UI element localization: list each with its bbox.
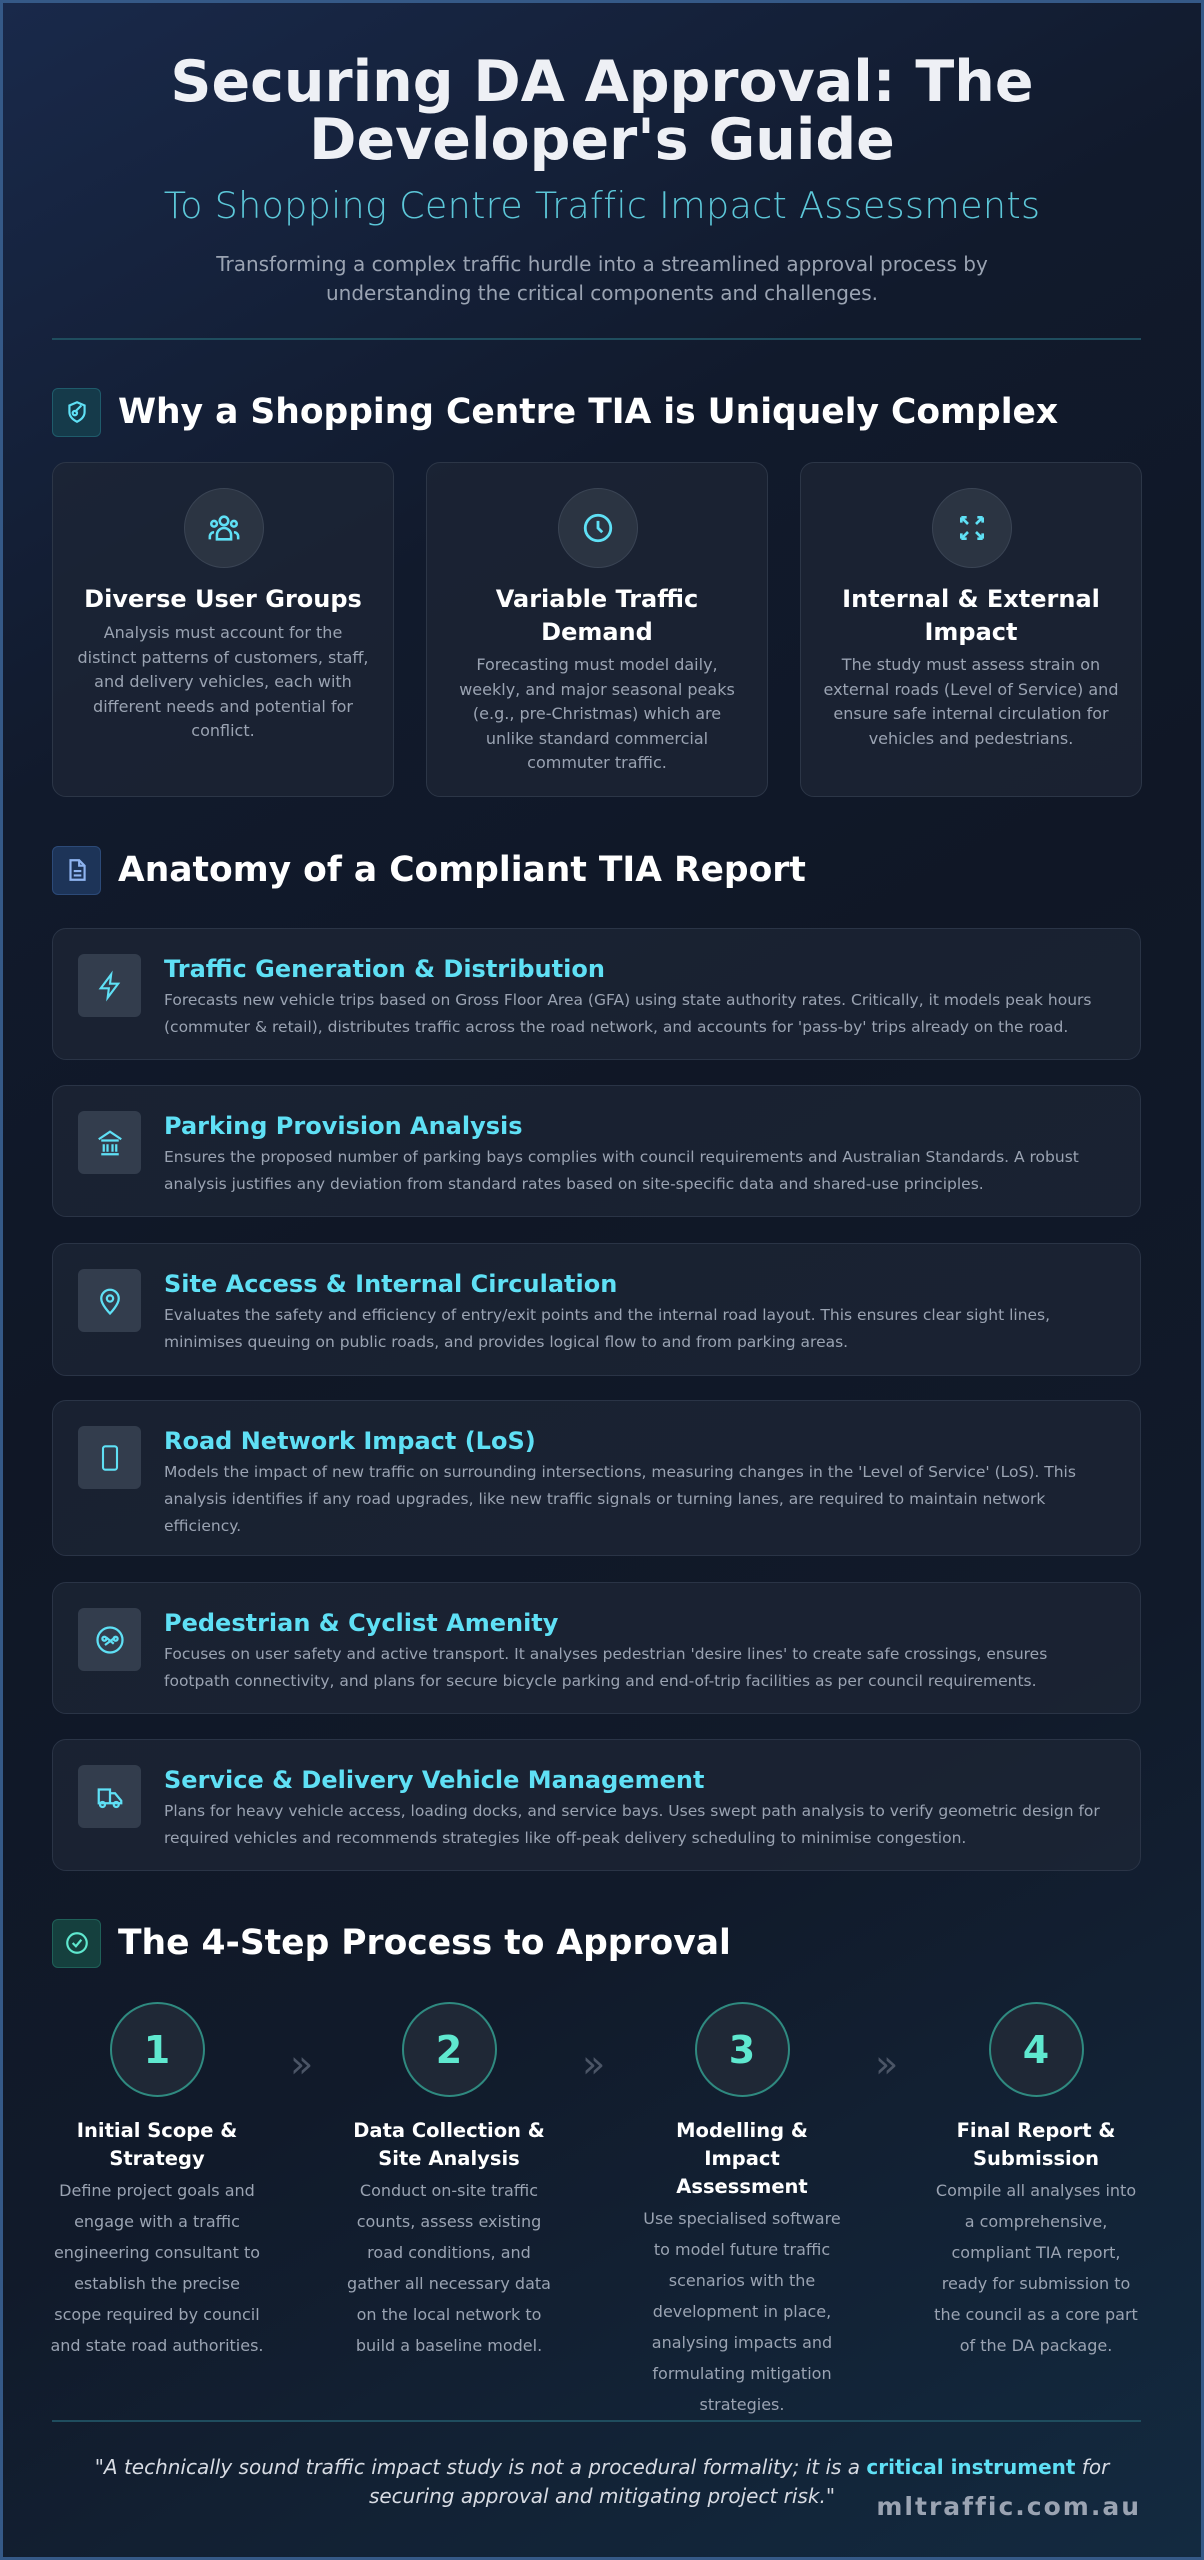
row: road network: Road Network Impact (LoS) (164, 1427, 536, 1455)
step 1: Define project goals and engage with a traffic engineering consultant to establish the precise scope required by council and state road authorities. (50, 2181, 264, 2355)
card: internal external (800, 462, 1142, 797)
step 2: Data Collection & (353, 2119, 545, 2142)
row: pedestrian: Focuses on user safety and active transport. It analyses pedestrian 'desire lines' to create safe crossings, ensures footpath connectivity, and plans for secure bicycle parking and end-of-trip facilities as per council requirements. (164, 1645, 1047, 1690)
row: parking: Ensures the proposed number of parking bays complies with council requirements and Australian Standards. A robust analysis justifies any deviation from standard rates based on site-specific data and shared-use principles. (164, 1148, 1079, 1193)
arrow 3: » (875, 2042, 898, 2086)
row: road network: Models the impact of new traffic on surrounding intersections, measuring changes in the 'Level of Service' (LoS). This analysis identifies if any road upgrades, like new traffic signals or turning lanes, are required to maintain network efficiency. (164, 1463, 1076, 1535)
heading: process: The 4-Step Process to Approval (118, 1923, 731, 1963)
row: pedestrian: Pedestrian & Cyclist Amenity (164, 1609, 558, 1637)
card: variable demand: Forecasting must model daily, weekly, and major seasonal peaks (e.g., pre-Christmas) which are unlike standard commercial commuter traffic. (459, 655, 735, 772)
card: diverse user groups: Analysis must account for the distinct patterns of customers, staff, and delivery vehicles, each with different needs and potential for conflict. (77, 623, 369, 740)
card: variable demand (426, 462, 768, 797)
row: service delivery: Service & Delivery Vehicle Management (164, 1766, 704, 1794)
title: Securing DA Approval: The (170, 49, 1034, 115)
arrow 2: » (582, 2042, 605, 2086)
step 2: Conduct on-site traffic counts, assess existing road conditions, and gather all necessary data on the local network to build a baseline model. (347, 2181, 551, 2355)
title: Developer's Guide (309, 107, 895, 173)
heading: anatomy: Anatomy of a Compliant TIA Report (118, 850, 806, 890)
title (170, 49, 1034, 173)
step 4: Compile all analyses into a comprehensive, compliant TIA report, ready for submission to the council as a core part of the DA package. (934, 2181, 1138, 2355)
subtitle: To Shopping Centre Traffic Impact Assessments (164, 184, 1040, 227)
row: service delivery: Plans for heavy vehicle access, loading docks, and service bays. Uses swept path analysis to verify geometric design for required vehicles and recommends strategies like off-peak delivery scheduling to minimise congestion. (164, 1802, 1100, 1847)
row: pedestrian (52, 1582, 1141, 1714)
row: traffic generation (52, 928, 1141, 1060)
brand: mltraffic.com.au (876, 2492, 1141, 2521)
step 1: Strategy (109, 2147, 205, 2170)
step 1: Initial Scope & (77, 2119, 237, 2142)
step 3: Impact (704, 2147, 780, 2170)
card: internal external: Internal & External Impact (842, 585, 1100, 646)
step 4: 4 (1023, 2028, 1049, 2072)
step 4: Final Report & (957, 2119, 1115, 2142)
card: internal external: The study must assess strain on external roads (Level of Service) and ensure safe internal circulation for vehicles and pedestrians. (824, 655, 1118, 748)
step 2 (347, 2002, 551, 2355)
row: parking: Parking Provision Analysis (164, 1112, 523, 1140)
row: parking (52, 1085, 1141, 1217)
row: traffic generation: Traffic Generation & Distribution (164, 955, 605, 983)
step 3: Use specialised software to model future traffic scenarios with the development in place, analysing impacts and formulating mitigation strategies. (643, 2209, 841, 2414)
step 3 (643, 2002, 841, 2414)
card: variable demand: Variable Traffic Demand (496, 585, 698, 646)
step 4 (934, 2002, 1138, 2355)
row: site access (52, 1243, 1141, 1376)
row: service delivery (52, 1739, 1141, 1871)
row: traffic generation: Forecasts new vehicle trips based on Gross Floor Area (GFA) using state authority rates. Critically, it models peak hours (commuter & retail), distributes traffic across the road network, and accounts for 'pass-by' trips already on the road. (164, 991, 1092, 1036)
heading: why complex: Why a Shopping Centre TIA is Uniquely Complex (118, 392, 1058, 432)
arrow 1: » (290, 2042, 313, 2086)
quote: "A technically sound traffic impact study is not a procedural formality; it is a critical instrument for securing approval and mitigating project risk." (95, 2455, 1109, 2508)
step 3: Modelling & (676, 2119, 808, 2142)
step 3: 3 (729, 2028, 755, 2072)
step 1: 1 (144, 2028, 170, 2072)
step 2: Site Analysis (378, 2147, 520, 2170)
card: diverse user groups: Diverse User Groups (84, 585, 362, 613)
step 4: Submission (973, 2147, 1099, 2170)
row: road network (52, 1400, 1141, 1556)
card: diverse user groups (52, 462, 394, 797)
step 3: Assessment (676, 2175, 808, 2198)
row: site access: Evaluates the safety and efficiency of entry/exit points and the internal road layout. This ensures clear sight lines, minimises queuing on public roads, and provides logical flow to and from parking areas. (164, 1306, 1050, 1351)
step 2: 2 (436, 2028, 462, 2072)
row: site access: Site Access & Internal Circulation (164, 1270, 617, 1298)
tagline: Transforming a complex traffic hurdle into a streamlined approval process by understanding the critical components and challenges. (216, 252, 988, 305)
step 1 (50, 2002, 264, 2355)
